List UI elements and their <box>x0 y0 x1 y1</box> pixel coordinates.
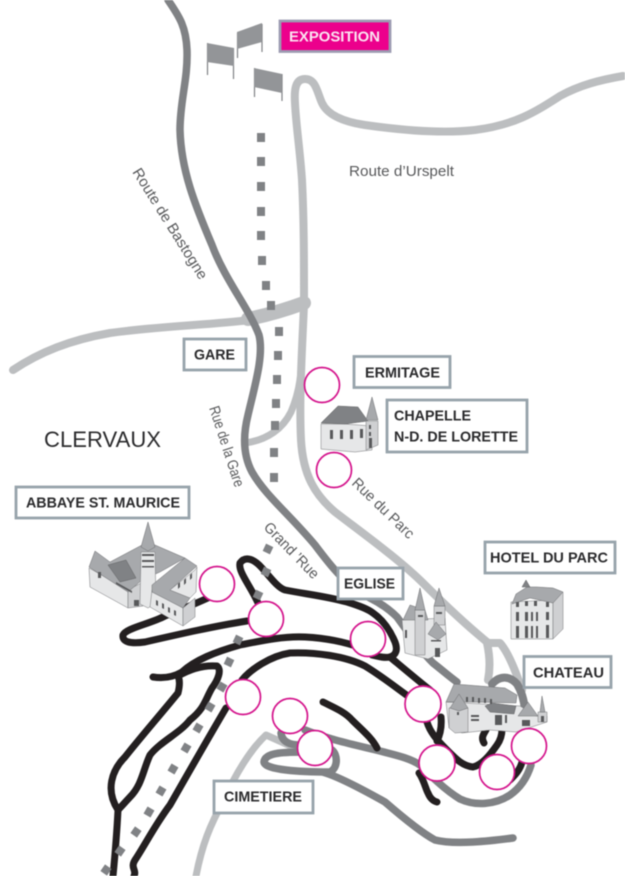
dotted footpath <box>100 133 283 876</box>
label: Eglise <box>338 568 403 599</box>
label: Abbaye St. Maurice: ABBAYE ST. MAURICE <box>26 494 180 512</box>
icon: chateau <box>446 684 547 733</box>
icon: exposition flags <box>207 23 282 101</box>
icon: eglise <box>402 588 447 659</box>
label: Hotel du Parc: HOTEL DU PARC <box>490 550 608 566</box>
dark grey roads <box>168 0 531 842</box>
label: Gare: GARE <box>194 346 235 364</box>
road name: Rue de la Gare: Rue de la Gare <box>205 404 247 489</box>
label: Exposition: EXPOSITION <box>289 28 380 46</box>
town name: Clervaux: CLERVAUX <box>44 427 161 452</box>
icon: hotel du parc <box>511 580 563 639</box>
road name: Route de Bastogne: Route de Bastogne <box>129 165 211 283</box>
label: Gare <box>184 339 246 370</box>
points of interest circles <box>200 368 546 790</box>
label: Cimetiere: CIMETIERE <box>224 788 302 806</box>
icon: abbaye St. Maurice <box>89 522 197 626</box>
label: Ermitage: ERMITAGE <box>365 364 440 382</box>
road name: Route d'Urspelt: Route d’Urspelt <box>349 163 455 180</box>
label: Chapelle N-D. de Lorette: CHAPELLE <box>394 408 471 424</box>
label: Chateau: CHATEAU <box>533 664 604 682</box>
label: Chapelle N-D. de Lorette <box>387 400 527 452</box>
label: Chapelle N-D. de Lorette: N-D. DE LORETTE <box>394 428 518 446</box>
label: Chateau <box>524 656 611 688</box>
icon: chapelle N-D. de Lorette <box>321 397 378 452</box>
label: Hotel du Parc <box>485 542 615 573</box>
label: Abbaye St. Maurice <box>16 487 189 518</box>
label: Exposition <box>280 21 390 52</box>
label: Eglise: EGLISE <box>344 576 395 592</box>
walking route in black <box>111 559 522 876</box>
label: Ermitage <box>354 356 450 388</box>
road name: Grand'Rue: Grand ’Rue <box>260 519 322 583</box>
label: Cimetiere <box>214 781 313 813</box>
road name: Rue du Parc: Rue du Parc <box>348 475 418 543</box>
